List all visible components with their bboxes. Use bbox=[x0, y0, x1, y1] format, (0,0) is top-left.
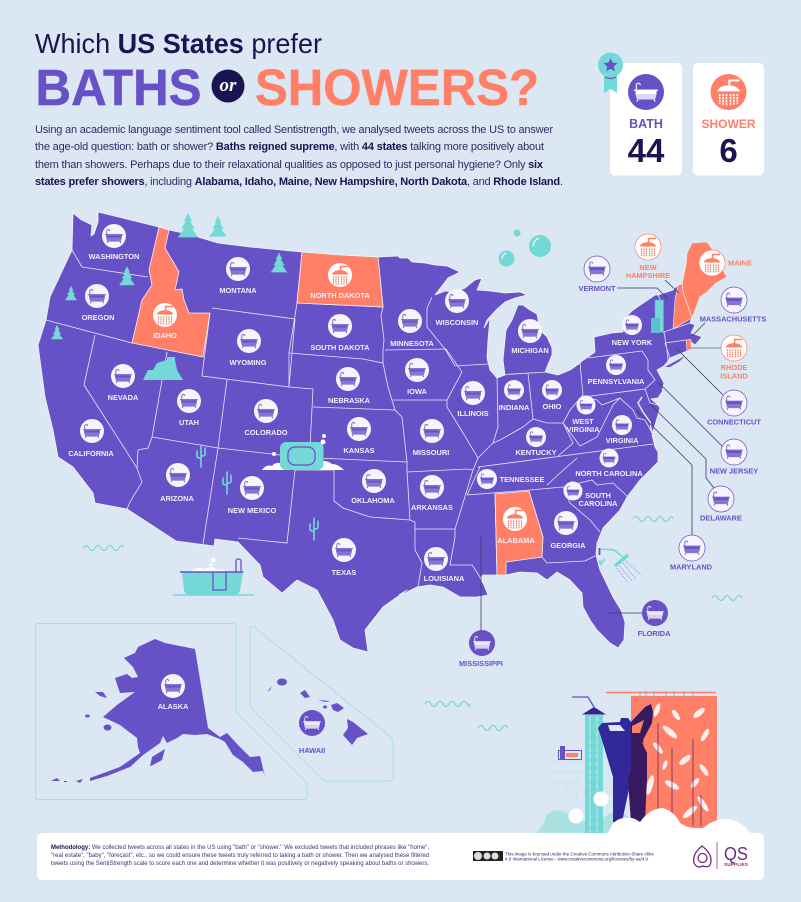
marker: Kansas bbox=[343, 417, 375, 455]
marker: New Hampshire bbox=[626, 234, 670, 280]
intro paragraph: states prefer showers, including Alabama, Idaho, Maine, New Hampshire, North Dakota, and Rhode Island. bbox=[35, 176, 563, 188]
marker: New York bbox=[612, 315, 653, 347]
icon: cacti bbox=[197, 445, 318, 540]
marker: Arkansas: ARKANSAS bbox=[411, 503, 453, 512]
curtain bbox=[631, 696, 717, 828]
marker: Georgia bbox=[551, 511, 586, 550]
icon: soap bar with suds bbox=[262, 434, 344, 470]
icon: award ribbon bbox=[598, 52, 623, 93]
map: contiguous US bbox=[38, 212, 727, 652]
marker: Oregon bbox=[82, 284, 114, 322]
marker: Vermont: VERMONT bbox=[579, 284, 616, 293]
marker: North Dakota bbox=[310, 263, 370, 300]
marker: Wyoming bbox=[230, 329, 267, 367]
marker: Arizona bbox=[160, 463, 194, 503]
title: baths: BATHS bbox=[36, 59, 202, 116]
marker: Texas: TEXAS bbox=[332, 568, 356, 577]
state: New Hampshire shape bbox=[673, 284, 692, 329]
marker: Vermont bbox=[579, 256, 616, 293]
shelf bbox=[558, 746, 582, 760]
marker: Alaska bbox=[158, 674, 189, 711]
methodology text bbox=[51, 845, 429, 867]
marker: North Carolina: NORTH CAROLINA bbox=[575, 469, 643, 478]
marker: West Virginia bbox=[567, 396, 600, 434]
marker: Illinois bbox=[457, 381, 489, 418]
map: Alaska bbox=[51, 639, 265, 783]
marker: South Dakota bbox=[311, 314, 370, 352]
map: Hawaii bbox=[267, 678, 368, 745]
marker: Montana: MONTANA bbox=[219, 286, 257, 295]
icon: cabin by the lake bbox=[143, 357, 183, 380]
marker: Nevada bbox=[108, 364, 139, 402]
state: Rhode Island shape bbox=[686, 339, 691, 351]
marker: Pennsylvania: PENNSYLVANIA bbox=[588, 377, 645, 386]
marker: North Carolina bbox=[575, 448, 643, 478]
marker: Arizona: ARIZONA bbox=[160, 494, 194, 503]
marker: Iowa: IOWA bbox=[407, 387, 428, 396]
licence text: 4.0 International License - www.creativecommons.org/licenses/by-sa/4.0 bbox=[505, 856, 648, 862]
icon: skyscraper bbox=[651, 300, 664, 333]
marker: Minnesota bbox=[390, 309, 435, 348]
logo: QS Supplies: QS bbox=[724, 844, 748, 864]
marker: Utah: UTAH bbox=[179, 418, 199, 427]
marker: West Virginia: VIRGINIA bbox=[567, 425, 600, 434]
marker: Connecticut bbox=[707, 390, 761, 426]
marker: Oregon: OREGON bbox=[82, 313, 114, 322]
marker: Oklahoma: OKLAHOMA bbox=[351, 496, 395, 505]
floating bubbles bbox=[568, 792, 608, 824]
marker: Georgia: GEORGIA bbox=[551, 541, 586, 550]
stream lines bbox=[590, 716, 597, 833]
map: Long Island bbox=[665, 356, 685, 367]
marker: Mississippi: MISSISSIPPI bbox=[459, 659, 503, 668]
methodology text: Methodology: We collected tweets across all states in the US using "bath" or "shower." We excluded tweets that included phrases like "home", bbox=[51, 845, 429, 851]
intro paragraph: the age-old question: bath or shower? Baths reigned supreme, with 44 states talking more positively about bbox=[35, 141, 544, 153]
marker: Arkansas bbox=[411, 475, 453, 512]
arm gap bbox=[608, 725, 625, 731]
shower head bbox=[582, 707, 606, 714]
marker: Maryland: MARYLAND bbox=[670, 562, 713, 572]
brick wall bbox=[552, 762, 613, 803]
marker: Delaware: DELAWARE bbox=[700, 514, 742, 522]
marker: Kentucky bbox=[515, 427, 557, 457]
card: shower 6: 6 bbox=[719, 132, 738, 169]
marker: Virginia: VIRGINIA bbox=[606, 436, 639, 445]
marker: New Jersey bbox=[710, 439, 758, 476]
marker: Illinois: ILLINOIS bbox=[457, 409, 489, 418]
marker: Indiana: INDIANA bbox=[499, 403, 530, 412]
marker: South Dakota: SOUTH DAKOTA bbox=[311, 343, 370, 352]
marker: New Mexico: NEW MEXICO bbox=[228, 506, 276, 515]
methodology text: tweets using the SentiStrength scale to score each one and determine whether it was positively or negatively speaking about baths or showers. bbox=[51, 861, 429, 867]
marker: Florida bbox=[638, 600, 671, 638]
panel: Alaska inset bbox=[36, 624, 307, 800]
marker: Montana bbox=[219, 257, 257, 295]
decorative waves bbox=[83, 516, 742, 730]
teal suds bbox=[535, 810, 640, 834]
marker: Washington: WASHINGTON bbox=[89, 252, 139, 261]
marker: Maine bbox=[699, 250, 752, 276]
panel: methodology bbox=[37, 833, 764, 880]
marker: Colorado: COLORADO bbox=[244, 428, 288, 437]
marker: Michigan bbox=[511, 319, 549, 355]
figure front bbox=[598, 718, 631, 822]
marker: North Dakota: NORTH DAKOTA bbox=[310, 291, 370, 300]
marker: Louisiana bbox=[424, 547, 465, 583]
marker: Maryland bbox=[670, 535, 713, 572]
logo: QS Supplies bbox=[694, 842, 748, 869]
water stream bbox=[585, 715, 603, 833]
icon: bubbles bbox=[498, 230, 551, 266]
badge: or bbox=[212, 70, 244, 102]
card: shower 6: SHOWER bbox=[702, 117, 756, 131]
marker: Ohio bbox=[542, 380, 562, 411]
card: bath 44 bbox=[610, 63, 682, 176]
marker: South Carolina: CAROLINA bbox=[578, 499, 618, 508]
marker: Alabama: ALABAMA bbox=[497, 536, 535, 545]
badge: or: or bbox=[220, 75, 237, 96]
marker: Nevada: NEVADA bbox=[108, 393, 139, 402]
icon: trees bbox=[51, 213, 287, 339]
licence text: This image is licensed under the Creative Commons Attribution-Share Alike bbox=[505, 852, 654, 856]
marker: Delaware bbox=[700, 486, 742, 522]
marker: Hawaii bbox=[299, 710, 325, 755]
marker: California bbox=[68, 419, 114, 458]
marker: New York: NEW YORK bbox=[612, 338, 653, 347]
marker: Alabama bbox=[497, 507, 535, 545]
licence text bbox=[505, 852, 654, 862]
marker: Michigan: MICHIGAN bbox=[511, 346, 549, 355]
marker: Tennessee: TENNESSEE bbox=[500, 475, 544, 484]
marker: Kansas: KANSAS bbox=[343, 446, 375, 455]
marker: Rhode Island: RHODE bbox=[721, 363, 747, 372]
marker: Nebraska: NEBRASKA bbox=[328, 396, 371, 405]
marker: Oklahoma bbox=[351, 469, 395, 505]
marker: Louisiana: LOUISIANA bbox=[424, 574, 465, 583]
marker: Idaho: IDAHO bbox=[153, 331, 177, 340]
marker: New Mexico bbox=[228, 476, 276, 515]
gap between arm and head bbox=[632, 720, 644, 733]
marker: Missouri bbox=[413, 419, 449, 457]
white suds bbox=[608, 808, 751, 834]
curtain pleat lines bbox=[643, 723, 701, 826]
marker: South Carolina bbox=[564, 482, 618, 508]
marker: Massachusetts: MASSACHUSETTS bbox=[700, 314, 766, 324]
state: Maine shape bbox=[682, 242, 727, 318]
marker: Idaho bbox=[153, 303, 177, 340]
marker: Colorado bbox=[244, 399, 288, 437]
illustration: shower scene bbox=[535, 691, 717, 834]
icon: bathtub illustration bbox=[173, 558, 254, 595]
marker: Kentucky: KENTUCKY bbox=[515, 448, 557, 457]
marker: Rhode Island: ISLAND bbox=[720, 372, 748, 380]
figure behind curtain bbox=[628, 704, 653, 823]
marker: Missouri: MISSOURI bbox=[413, 448, 449, 457]
marker: Maine: MAINE bbox=[728, 258, 752, 268]
marker: Alaska: ALASKA bbox=[158, 702, 189, 711]
marker: West Virginia: WEST bbox=[572, 417, 594, 426]
marker: New Jersey: NEW JERSEY bbox=[710, 466, 758, 476]
marker: South Carolina: SOUTH bbox=[585, 491, 611, 500]
leader lines bbox=[481, 280, 723, 632]
curtain leaves bbox=[645, 703, 711, 820]
marker: Indiana bbox=[499, 380, 530, 412]
marker: Texas bbox=[332, 538, 356, 577]
shower pipe bbox=[572, 697, 594, 707]
marker: Pennsylvania bbox=[588, 355, 645, 386]
title: which US states prefer: Which US States prefer bbox=[35, 28, 322, 59]
marker: Virginia bbox=[606, 415, 639, 445]
state: North Dakota shape bbox=[297, 252, 383, 307]
title: showers: SHOWERS? bbox=[255, 59, 539, 116]
map: state borders bbox=[46, 250, 690, 587]
marker: Hawaii: HAWAII bbox=[299, 746, 325, 755]
curtain rod bbox=[606, 692, 716, 694]
marker: Ohio: OHIO bbox=[543, 402, 562, 411]
map: Chesapeake Bay bbox=[638, 397, 652, 433]
marker: Massachusetts bbox=[700, 287, 766, 324]
marker: California: CALIFORNIA bbox=[68, 449, 114, 458]
marker: Wisconsin bbox=[436, 289, 478, 327]
marker: Iowa bbox=[405, 358, 429, 396]
logo: QS Supplies: SUPPLIES bbox=[724, 862, 748, 867]
state: Alabama shape bbox=[495, 491, 543, 575]
intro paragraph bbox=[35, 124, 563, 188]
marker: Wyoming: WYOMING bbox=[230, 358, 267, 367]
marker: New Hampshire: HAMPSHIRE bbox=[626, 271, 670, 280]
marker: Utah bbox=[177, 389, 201, 427]
marker: Florida: FLORIDA bbox=[638, 629, 671, 638]
marker: Connecticut: CONNECTICUT bbox=[707, 418, 761, 426]
licence badge bbox=[473, 851, 503, 861]
methodology text: "real estate", "baby", "forecast", etc., so we could ensure these tweets truly referred to taking a bath or shower. Then we analysed these filtered bbox=[51, 853, 429, 859]
card: bath 44: 44 bbox=[628, 132, 665, 169]
intro paragraph: them than showers. Perhaps due to their relaxational qualities as opposed to just personal hygiene? Only six bbox=[35, 159, 544, 171]
marker: Nebraska bbox=[328, 367, 371, 405]
state: Idaho shape bbox=[132, 227, 210, 357]
curtain rings bbox=[640, 691, 693, 699]
marker: Washington bbox=[89, 224, 139, 261]
card: shower 6 bbox=[693, 63, 764, 176]
marker: Rhode Island bbox=[720, 335, 748, 380]
marker: Minnesota: MINNESOTA bbox=[390, 339, 435, 348]
icon: hand shower bbox=[600, 548, 641, 584]
marker: New Hampshire: NEW bbox=[639, 263, 657, 272]
marker: Tennessee bbox=[477, 469, 544, 489]
marker: Wisconsin: WISCONSIN bbox=[436, 318, 478, 327]
intro paragraph: Using an academic language sentiment tool called Sentistrength, we analysed tweets across the US to answer bbox=[35, 124, 553, 136]
panel: Hawaii inset bbox=[250, 626, 393, 781]
marker: Mississippi bbox=[459, 630, 503, 668]
card: bath 44: BATH bbox=[629, 117, 663, 131]
